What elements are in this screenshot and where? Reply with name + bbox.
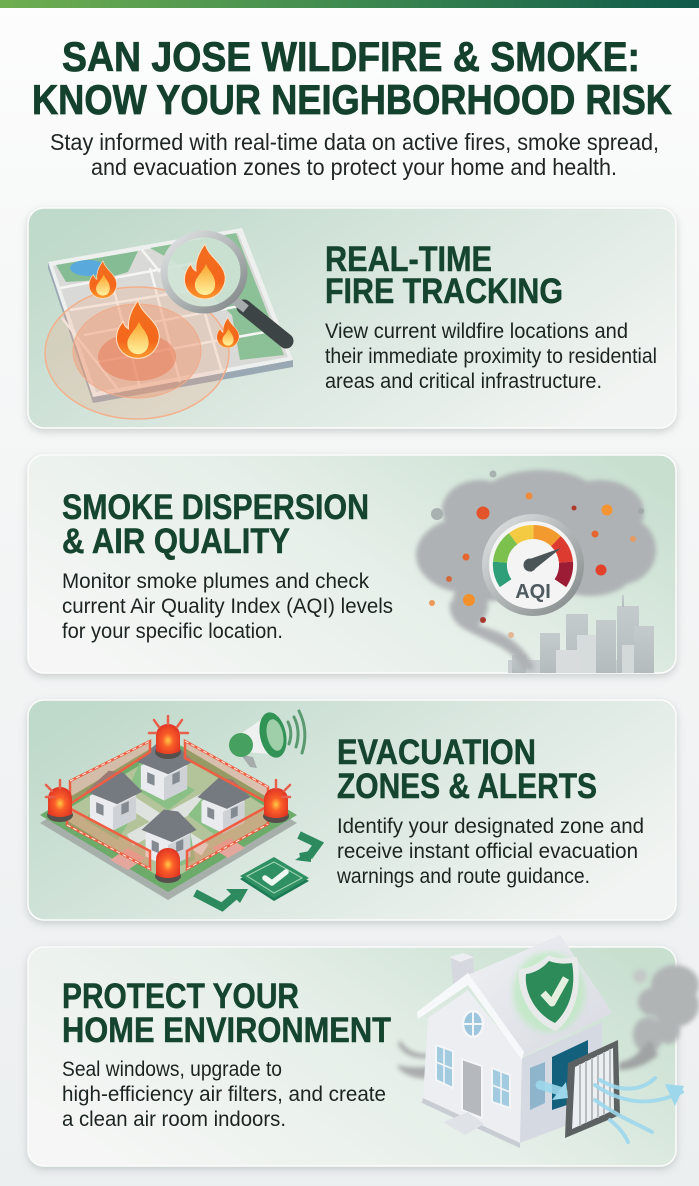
icon: megaphone	[229, 710, 305, 768]
subtitle: and evacuation zones to protect your home and health.	[91, 154, 617, 180]
body text: a clean air room indoors.	[62, 1108, 286, 1131]
illustration: smoke outside	[618, 965, 699, 1070]
body text	[336, 815, 644, 888]
panel: evacuation zones and alerts	[28, 700, 676, 920]
body text	[62, 570, 393, 643]
body text: receive instant official evacuation	[337, 840, 638, 863]
heading: EVACUATION	[337, 733, 536, 772]
body text: Seal windows, upgrade to	[62, 1058, 282, 1081]
panel: smoke dispersion and air quality	[28, 455, 676, 673]
card background	[28, 455, 676, 673]
icon: clean air arrows	[540, 1078, 682, 1142]
heading	[325, 240, 563, 311]
heading	[62, 977, 391, 1050]
top accent bar	[0, 0, 699, 8]
heading	[62, 488, 369, 561]
subtitle	[50, 129, 659, 180]
icon: route arrows	[195, 835, 318, 907]
panel: real-time fire tracking	[28, 208, 676, 428]
icon: checkmark tile	[240, 857, 309, 901]
body text: current Air Quality Index (AQI) levels	[62, 595, 393, 618]
particles	[429, 470, 644, 638]
illustration: fire map with magnifier	[45, 228, 293, 419]
smoke radius rings	[45, 287, 229, 419]
body text: for your specific location.	[62, 620, 283, 643]
body text: Identify your designated zone and	[337, 815, 644, 838]
illustration: city skyline	[508, 595, 654, 673]
body text: high-efficiency air filters, and create	[62, 1083, 386, 1106]
body text	[325, 320, 657, 393]
zone barrier	[67, 741, 268, 869]
body text	[62, 1058, 386, 1131]
alert beacons	[46, 716, 290, 883]
title: SAN JOSE WILDFIRE & SMOKE:	[62, 33, 640, 80]
icon: AQI gauge: AQI	[515, 581, 551, 603]
body text: areas and critical infrastructure.	[325, 370, 602, 393]
heading: HOME ENVIRONMENT	[62, 1011, 391, 1050]
heading: PROTECT YOUR	[62, 977, 299, 1016]
title	[32, 33, 672, 123]
illustration: smoke cloud	[416, 470, 656, 670]
icon: magnifying glass	[164, 234, 286, 341]
card background	[28, 947, 676, 1166]
illustration: house	[417, 935, 613, 1148]
houses	[86, 741, 250, 868]
body text: warnings and route guidance.	[336, 865, 590, 888]
icon: air filter	[565, 1040, 620, 1138]
icon: flames	[89, 244, 239, 358]
illustration: smoke at door	[398, 1040, 442, 1079]
windows and door	[436, 1011, 545, 1135]
heading: REAL-TIME	[325, 240, 492, 279]
heading: FIRE TRACKING	[325, 272, 563, 311]
heading: ZONES & ALERTS	[337, 767, 597, 806]
card background	[28, 700, 676, 920]
card background	[28, 208, 676, 428]
heading: & AIR QUALITY	[62, 522, 290, 561]
icon: shield	[513, 952, 585, 1032]
heading	[337, 733, 597, 806]
subtitle: Stay informed with real-time data on active fires, smoke spread,	[50, 129, 659, 155]
illustration: neighborhood evacuation zone	[40, 716, 297, 900]
icon: AQI gauge	[482, 514, 584, 616]
heading: SMOKE DISPERSION	[62, 488, 369, 527]
body text: Monitor smoke plumes and check	[62, 570, 369, 593]
body text: their immediate proximity to residential	[325, 345, 657, 368]
air filter opening	[552, 1040, 588, 1110]
panel: protect your home environment	[28, 935, 699, 1166]
body text: View current wildfire locations and	[325, 320, 628, 343]
